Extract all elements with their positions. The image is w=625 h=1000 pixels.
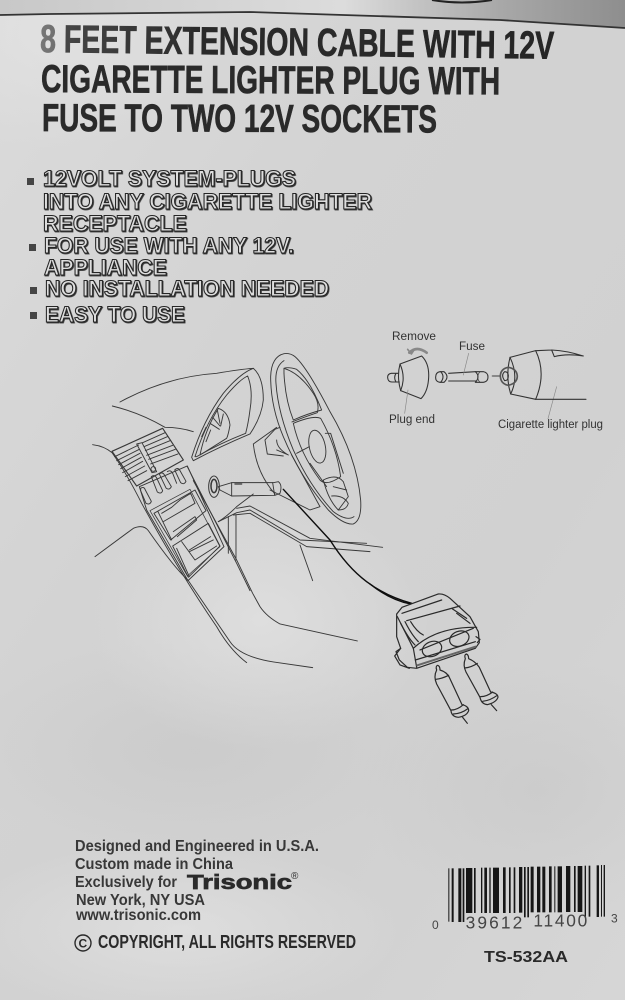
fuse diagram — [388, 349, 586, 419]
dashboard outlines — [120, 368, 253, 402]
climate control panel — [139, 466, 224, 581]
address block: Exclusively for — [75, 874, 177, 891]
barcode digits: 3 — [611, 911, 618, 925]
twin socket adapter with plugs — [370, 584, 498, 723]
Trisonic logo: Trisonic — [187, 872, 292, 894]
Trisonic logo: ® — [291, 871, 299, 882]
instrument cluster — [192, 368, 263, 461]
steering wheel — [253, 353, 361, 524]
barcode bars — [448, 865, 605, 922]
feature bullet list — [27, 166, 372, 327]
left plug — [435, 665, 469, 723]
fuse diagram labels: Plug end — [389, 414, 435, 426]
dash control buttons — [141, 468, 186, 504]
Trisonic logo — [187, 871, 299, 894]
bullet text: NO INSTALLATION NEEDED — [45, 276, 329, 301]
address block — [75, 838, 319, 924]
lighter plug inserted in socket — [209, 476, 281, 522]
bullet markers — [27, 178, 37, 319]
top edge band — [0, 0, 625, 28]
address block: Custom made in China — [75, 856, 233, 873]
air vents — [112, 428, 183, 486]
bullet text: INTO ANY CIGARETTE LIGHTER — [43, 189, 372, 214]
fuse — [436, 372, 447, 382]
socket housing — [395, 594, 480, 668]
bullet text: APPLIANCE — [44, 255, 167, 280]
fuse diagram labels: Cigarette lighter plug — [498, 419, 603, 431]
barcode digits: 0 — [432, 918, 439, 932]
copyright line: C — [78, 936, 88, 950]
bullet text: 12VOLT SYSTEM-PLUGS — [43, 166, 296, 191]
fuse diagram labels: Fuse — [459, 341, 485, 353]
power cable — [283, 489, 412, 603]
title — [40, 18, 554, 141]
barcode digits: 11400 — [533, 911, 587, 931]
fuse diagram labels: Remove — [392, 331, 436, 343]
copyright line: COPYRIGHT, ALL RIGHTS RESERVED — [98, 932, 356, 952]
fuse diagram labels — [389, 331, 603, 431]
title: FUSE TO TWO 12V SOCKETS — [42, 97, 437, 141]
bullet text: EASY TO USE — [45, 302, 185, 327]
model number: TS-532AA — [484, 949, 568, 966]
address block: www.trisonic.com — [75, 907, 201, 924]
plug end — [398, 356, 429, 399]
cigarette lighter plug — [493, 373, 499, 379]
right plug — [464, 654, 498, 711]
bullet text: RECEPTACLE — [43, 211, 187, 236]
cable end — [370, 584, 411, 604]
car dashboard illustration — [93, 353, 412, 668]
remove arrow — [409, 349, 427, 353]
bullet text — [43, 166, 372, 327]
company information — [75, 838, 356, 952]
address block: New York, NY USA — [76, 892, 205, 909]
address block: Designed and Engineered in U.S.A. — [75, 838, 319, 855]
bullet text: FOR USE WITH ANY 12V. — [44, 233, 294, 258]
barcode digits: 39612 — [466, 913, 522, 933]
barcode digits — [432, 911, 618, 933]
barcode — [432, 865, 618, 933]
centre console edges — [187, 467, 250, 591]
